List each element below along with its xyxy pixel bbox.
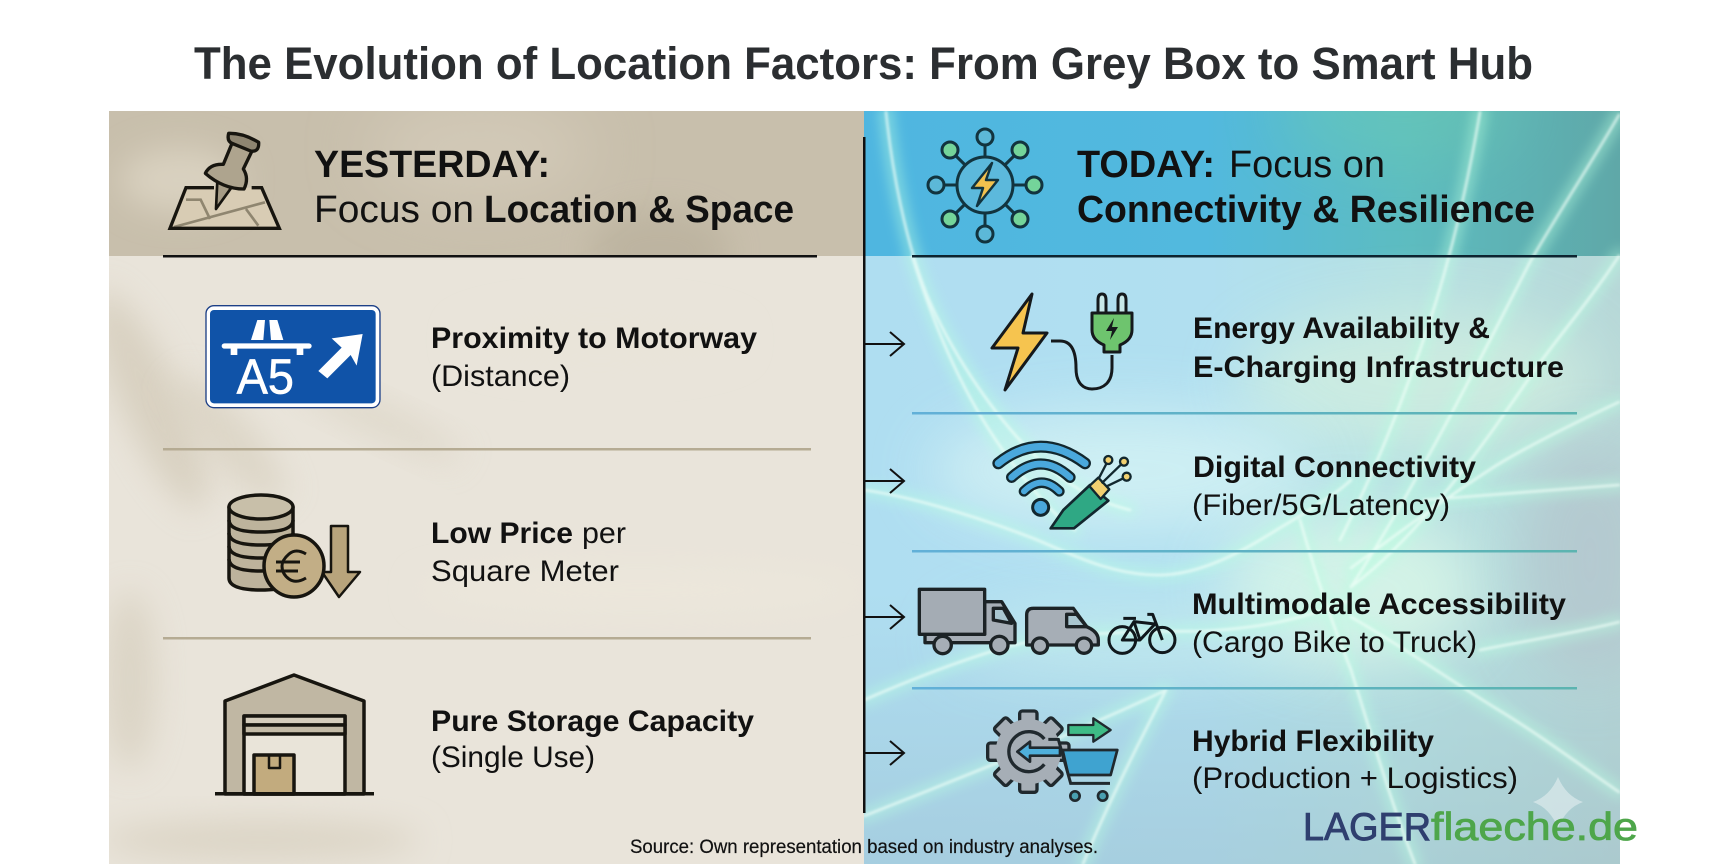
icon: motorway sign xyxy=(206,306,380,408)
source note: Source: Own representation based on industry analyses. xyxy=(630,837,1098,858)
text: digital connectivity: Digital Connectivity xyxy=(1193,451,1476,484)
central divider xyxy=(863,137,866,813)
text: digital connectivity xyxy=(1192,451,1476,522)
text: hybrid flexibility xyxy=(1192,725,1518,795)
left panel background xyxy=(72,100,864,864)
heading: today xyxy=(1077,144,1535,231)
heading: yesterday: Focus on xyxy=(314,189,474,231)
text: multimodale accessibility: Multimodale Accessibility xyxy=(1192,588,1566,621)
arrow 1 xyxy=(864,332,904,356)
title: The Evolution of Location Factors: From Grey Box to Smart Hub xyxy=(194,38,1533,89)
logo: LAGER xyxy=(1303,806,1431,849)
icon: warehouse xyxy=(215,675,374,796)
icon: gear arrows cart xyxy=(988,711,1117,801)
icon: coins and down arrow xyxy=(229,495,360,597)
text: proximity to motorway: (Distance) xyxy=(431,360,570,393)
header rule xyxy=(163,255,817,258)
text: low price xyxy=(431,517,626,588)
icon: motorway sign: A5 xyxy=(237,350,294,404)
text: pure storage xyxy=(431,705,754,774)
icon: map pin xyxy=(170,133,279,228)
text: energy availability: Energy Availability & xyxy=(1193,312,1490,345)
arrow 3 xyxy=(864,605,904,629)
icon: wifi and fibre xyxy=(998,447,1131,528)
text: energy availability xyxy=(1193,312,1564,384)
text: low price: Low Price xyxy=(431,517,573,550)
text: hybrid flexibility: Hybrid Flexibility xyxy=(1192,725,1434,758)
arrow 2 xyxy=(864,469,904,493)
panel: yesterday xyxy=(72,100,864,864)
text: proximity to motorway: Proximity to Motorway xyxy=(431,322,757,355)
text: pure storage: (Single Use) xyxy=(431,741,595,774)
heading: yesterday xyxy=(314,144,794,231)
icon: truck van bike xyxy=(919,589,1175,654)
heading: today: Focus on xyxy=(1229,144,1385,186)
text: multimodale accessibility xyxy=(1192,588,1566,659)
text: multimodale accessibility: (Cargo Bike to Truck) xyxy=(1192,626,1477,659)
text: energy availability: E-Charging Infrastructure xyxy=(1193,351,1564,384)
logo: flaeche.de xyxy=(1431,806,1638,849)
text: low price: per xyxy=(582,517,626,550)
icon: energy bolt and plug xyxy=(992,294,1132,390)
text: hybrid flexibility: (Production + Logistics) xyxy=(1192,762,1518,795)
heading: yesterday: YESTERDAY: xyxy=(314,144,550,186)
text: digital connectivity: (Fiber/5G/Latency) xyxy=(1192,489,1450,522)
text: proximity to motorway xyxy=(431,322,757,393)
logo xyxy=(1303,806,1638,849)
right panel background xyxy=(864,111,1620,864)
arrow 4 xyxy=(864,741,904,765)
heading: today: Connectivity & Resilience xyxy=(1077,189,1535,231)
text: low price: Square Meter xyxy=(431,555,619,588)
icon: connectivity network xyxy=(928,129,1042,242)
panel: today xyxy=(863,111,1620,864)
heading: yesterday: Location & Space xyxy=(484,189,794,231)
heading: today: TODAY: xyxy=(1077,144,1215,186)
text: pure storage: Pure Storage Capacity xyxy=(431,705,754,738)
header rule xyxy=(912,255,1577,258)
